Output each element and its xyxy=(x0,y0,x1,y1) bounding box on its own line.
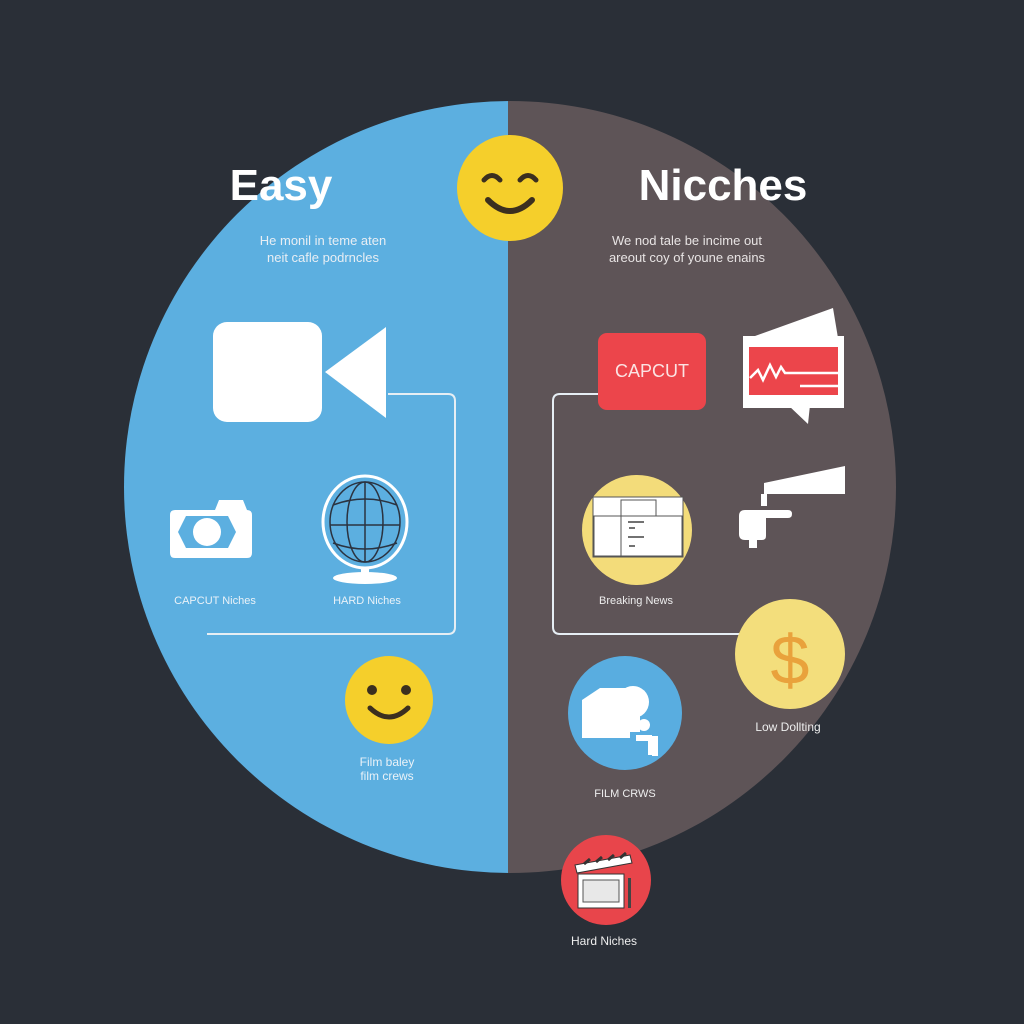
icon: clapper xyxy=(561,835,651,925)
icon: CAPCUT box xyxy=(598,333,706,410)
icon: pointing hand xyxy=(739,466,845,548)
label: Film baley film crews: Film baley xyxy=(360,755,414,769)
icon: CAPCUT box: CAPCUT xyxy=(615,361,689,381)
text: left subtitle: neit cafle podrncles xyxy=(267,250,380,265)
label: Low Dollting: Low Dollting xyxy=(755,720,821,734)
title: Easy: Easy xyxy=(230,161,333,210)
panel: easy (left half) xyxy=(100,90,508,890)
icon: dollar: $ xyxy=(771,621,809,699)
icon: bottom smiley xyxy=(345,656,433,744)
text: left subtitle: He monil in teme aten xyxy=(260,233,386,248)
label: Film baley film crews: film crews xyxy=(360,769,414,783)
text: left subtitle xyxy=(260,233,386,265)
icon: chart card xyxy=(743,308,844,424)
icon: video camera xyxy=(213,322,386,422)
icon: breaking news xyxy=(582,475,692,585)
icon: top smiley xyxy=(457,135,563,241)
panel: niches (right half) xyxy=(508,90,908,890)
text: right subtitle xyxy=(609,233,766,265)
label: Film baley film crews xyxy=(360,755,414,783)
label: HARD Niches: HARD Niches xyxy=(333,595,401,607)
label: FILM CRWS: FILM CRWS xyxy=(594,788,656,800)
text: right subtitle: areout coy of youne enains xyxy=(609,250,766,265)
icon: film crew xyxy=(568,656,682,770)
label: Hard Niches: Hard Niches xyxy=(571,934,637,948)
icon: dollar xyxy=(735,599,845,709)
connector lines xyxy=(207,394,740,634)
title: Nicches: Nicches xyxy=(639,161,807,210)
label: CAPCUT Niches: CAPCUT Niches xyxy=(174,595,256,607)
icon: globe xyxy=(323,476,407,584)
icon: photo camera xyxy=(170,500,252,558)
label: Breaking News: Breaking News xyxy=(599,595,673,607)
text: right subtitle: We nod tale be incime out xyxy=(612,233,762,248)
